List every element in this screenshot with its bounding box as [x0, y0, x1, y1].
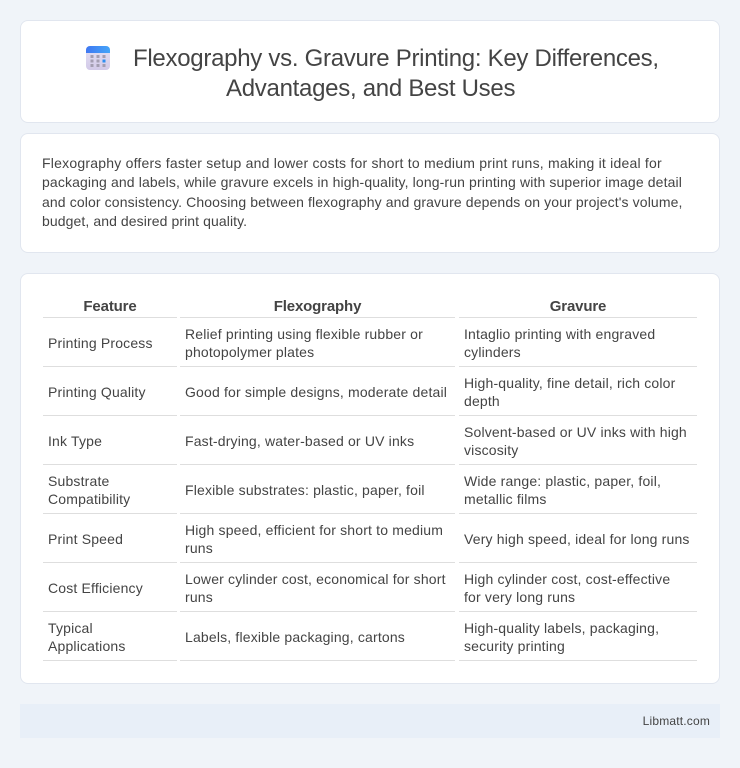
- row: printing process: Printing Process: [48, 335, 153, 351]
- row: substrate compatibility: Compatibility: [48, 491, 130, 507]
- row: printing quality: [48, 375, 676, 409]
- row: typical applications: Applications: [48, 638, 126, 654]
- intro text: [42, 155, 683, 229]
- row: cost efficiency: for very long runs: [464, 589, 575, 605]
- row: print speed: Very high speed, ideal for long runs: [464, 531, 690, 547]
- footer credit: Libmatt.com: [643, 714, 710, 728]
- row: printing process: [48, 326, 655, 360]
- row: ink type: Fast-drying, water-based or UV inks: [185, 433, 414, 449]
- column headers: Gravure: [550, 298, 606, 315]
- comparison table panel: [20, 273, 720, 684]
- row: ink type: [48, 424, 687, 458]
- row: cost efficiency: Lower cylinder cost, economical for short: [185, 571, 446, 587]
- row: cost efficiency: High cylinder cost, cost-effective: [464, 571, 670, 587]
- column headers: [83, 298, 606, 315]
- comparison table: [43, 298, 697, 661]
- row: printing process: Relief printing using flexible rubber or: [185, 326, 423, 342]
- row: substrate compatibility: Substrate: [48, 473, 109, 489]
- row: printing quality: depth: [464, 393, 500, 409]
- title: [133, 45, 659, 102]
- title: Flexography vs. Gravure Printing: Key Differences,: [133, 45, 659, 72]
- row: cost efficiency: [48, 571, 670, 605]
- row: typical applications: Typical: [48, 620, 93, 636]
- row: substrate compatibility: Flexible substrates: plastic, paper, foil: [185, 482, 425, 498]
- intro text: packaging and labels, while gravure excels in high-quality, long-run printing with superior image detail: [42, 174, 682, 190]
- row: typical applications: security printing: [464, 638, 565, 654]
- column headers: Flexography: [274, 298, 361, 315]
- row: printing quality: Good for simple designs, moderate detail: [185, 384, 447, 400]
- intro text: and color consistency. Choosing between flexography and gravure depends on your project's volume,: [42, 194, 683, 210]
- row: substrate compatibility: metallic films: [464, 491, 546, 507]
- row: printing process: cylinders: [464, 344, 521, 360]
- row: cost efficiency: Cost Efficiency: [48, 580, 143, 596]
- title: Advantages, and Best Uses: [226, 75, 515, 102]
- intro text: budget, and desired print quality.: [42, 213, 247, 229]
- row: substrate compatibility: [48, 473, 661, 507]
- row: print speed: [48, 522, 690, 556]
- row: substrate compatibility: Wide range: plastic, paper, foil,: [464, 473, 661, 489]
- row: typical applications: Labels, flexible packaging, cartons: [185, 629, 405, 645]
- row: print speed: Print Speed: [48, 531, 123, 547]
- intro text: Flexography offers faster setup and lower costs for short to medium print runs, making it ideal for: [42, 155, 662, 171]
- row: printing quality: Printing Quality: [48, 384, 146, 400]
- icon: calendar: [86, 46, 110, 70]
- row: cost efficiency: runs: [185, 589, 213, 605]
- row: typical applications: [48, 620, 659, 654]
- row: printing quality: High-quality, fine detail, rich color: [464, 375, 675, 391]
- intro panel: [20, 133, 720, 253]
- footer bar: [20, 704, 720, 738]
- row: printing process: photopolymer plates: [185, 344, 314, 360]
- row: ink type: viscosity: [464, 442, 518, 458]
- row: print speed: High speed, efficient for short to medium: [185, 522, 443, 538]
- row: typical applications: High-quality labels, packaging,: [464, 620, 659, 636]
- row: ink type: Solvent-based or UV inks with high: [464, 424, 687, 440]
- row: ink type: Ink Type: [48, 433, 102, 449]
- row: print speed: runs: [185, 540, 213, 556]
- row: printing process: Intaglio printing with engraved: [464, 326, 655, 342]
- header panel: [20, 20, 720, 123]
- column headers: Feature: [83, 298, 137, 315]
